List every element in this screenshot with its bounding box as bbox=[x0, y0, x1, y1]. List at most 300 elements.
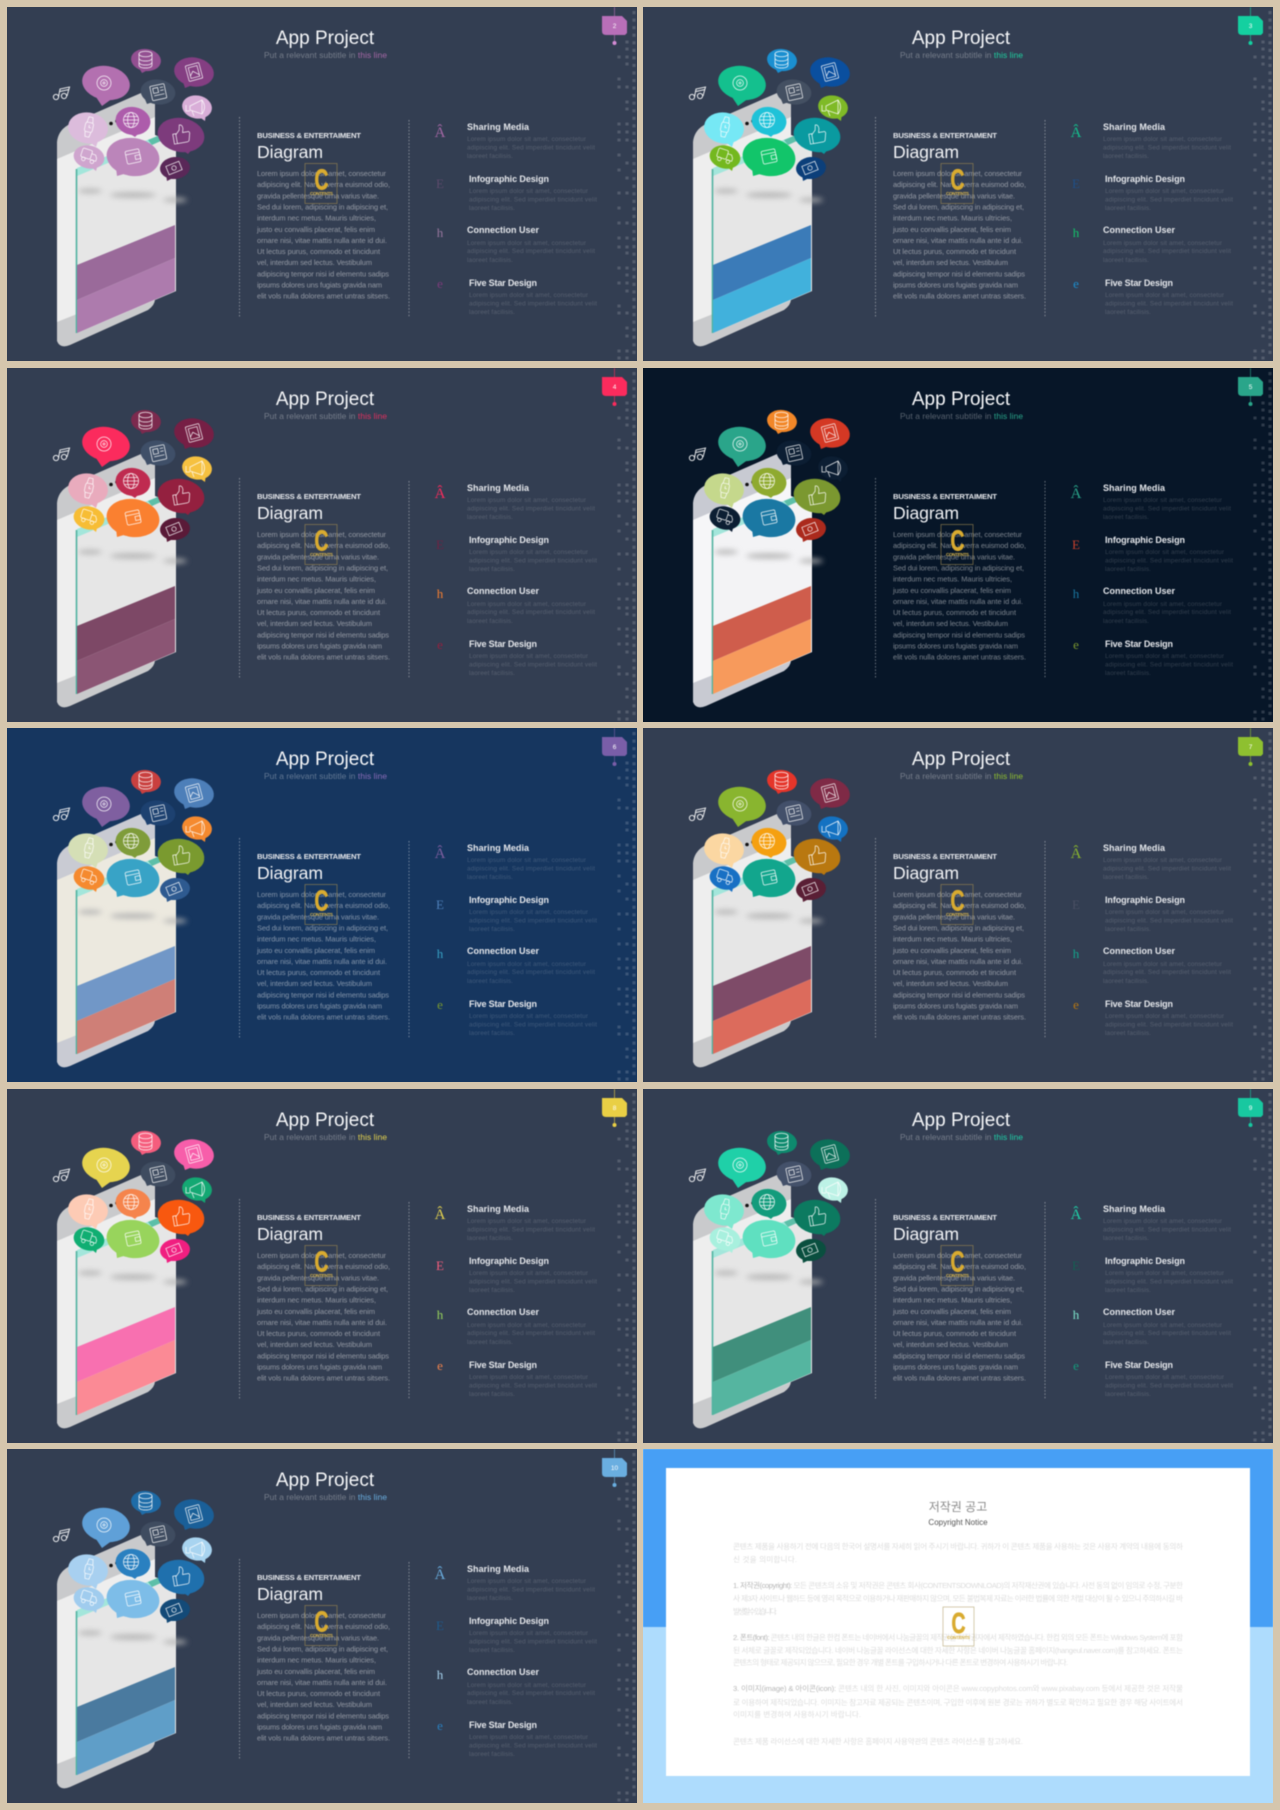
item: infographic design: laoreet facilisis. bbox=[469, 1286, 515, 1294]
panel: slide 10 sky blue bbox=[7, 1449, 637, 1803]
body text: Lorem ipsum dolor sit amet, consectetur bbox=[257, 530, 387, 538]
body text: Sed dui lorem, adipiscing in adipiscing et, bbox=[257, 563, 388, 572]
body text: Lorem ipsum dolor sit amet, consectetur bbox=[893, 169, 1023, 178]
notice body: 콘텐츠의 형태로 제공되지 않으므로, 필요한 경우 개별 폰트를 구입하시거나 다른 폰트로 변경하여 사용하시기 바랍니다. bbox=[733, 1657, 1068, 1667]
body text: ipsums dolores uns fugiats gravida nam bbox=[257, 1362, 382, 1371]
bubble: money bbox=[795, 516, 827, 542]
item: infographic design bbox=[1072, 534, 1233, 572]
body text: justo eu convallis placerat, felis enim bbox=[892, 946, 1011, 955]
item: connection user: adipiscing elit. Sed imperdiet tincidunt velit bbox=[467, 969, 595, 976]
phone illustration bbox=[57, 1535, 187, 1788]
item: connection user: Lorem ipsum dolor sit amet, consectetur bbox=[1103, 961, 1223, 968]
item: five star design: adipiscing elit. Sed imperdiet tincidunt velit bbox=[469, 1742, 597, 1750]
item: five star design: laoreet facilisis. bbox=[1105, 309, 1151, 316]
body text: elit vols nulla dolores amet untras sitsers. bbox=[257, 1013, 390, 1022]
notice body: 2. 폰트(font): 콘텐츠 내의 한글은 한컴 폰트는 네이버에서 나눔글꼴의 제작권을 저작권자에서 제작하였습니다. 한컴 외의 모든 폰트는 Windows System에 포함 bbox=[733, 1632, 1183, 1642]
kicker: BUSINESS & ENTERTAIMENT bbox=[257, 1212, 361, 1222]
icon: music note bbox=[689, 808, 706, 821]
bubble: globe bbox=[749, 825, 789, 859]
bubble: truck bbox=[707, 1224, 743, 1253]
body text: vel, interdum sed lectus. Vestibulum bbox=[257, 1700, 372, 1709]
dot pattern bbox=[619, 372, 634, 720]
bubble: thumbs up bbox=[155, 475, 207, 516]
notice subtitle: Copyright Notice bbox=[928, 1518, 988, 1527]
item: infographic design: adipiscing elit. Sed imperdiet tincidunt velit bbox=[1105, 557, 1233, 564]
item: connection user: laoreet facilisis. bbox=[467, 978, 513, 985]
body text: ipsums dolores uns fugiats gravida nam bbox=[893, 280, 1018, 290]
kicker: BUSINESS & ENTERTAIMENT bbox=[893, 131, 997, 140]
watermark logo: C bbox=[952, 1608, 966, 1640]
bubble: news bbox=[139, 1519, 177, 1549]
item: infographic design: Lorem ipsum dolor sit amet, consectetur bbox=[469, 548, 589, 556]
item: sharing media: laoreet facilisis. bbox=[1103, 1234, 1149, 1242]
notice body: 로 이용하여 제작되었습니다. 이미지는 참고자료 제공되는 콘텐츠이며, 구입한 이후에 원본 경로는 귀하가 별도로 확인하고 필요한 경우 해당 사이트에서 bbox=[733, 1697, 1183, 1707]
item: sharing media: Sharing Media bbox=[467, 1564, 530, 1574]
item: five star design: Lorem ipsum dolor sit amet, consectetur bbox=[469, 1734, 589, 1741]
body text: Sed dui lorem, adipiscing in adipiscing et, bbox=[893, 202, 1024, 212]
item: connection user: Connection User bbox=[1103, 946, 1175, 956]
body text: Sed dui lorem, adipiscing in adipiscing et, bbox=[257, 202, 388, 212]
notice title: 저작권 공고 bbox=[929, 1500, 987, 1514]
item: sharing media: adipiscing elit. Sed imperdiet tincidunt velit bbox=[1103, 866, 1231, 872]
body text: Ut lectus purus, commodo et tincidunt bbox=[257, 1328, 380, 1338]
body text: gravida pellentesque urna varius vitae. bbox=[893, 1273, 1015, 1282]
bubble: watch bbox=[66, 1191, 110, 1228]
body text bbox=[256, 169, 390, 301]
body text: ipsums dolores uns fugiats gravida nam bbox=[257, 280, 382, 290]
item: connection user: Lorem ipsum dolor sit amet, consectetur bbox=[1103, 600, 1223, 608]
heading: Diagram bbox=[893, 142, 959, 162]
bubble: watch bbox=[66, 110, 110, 147]
body text: Sed dui lorem, adipiscing in adipiscing et, bbox=[257, 924, 388, 932]
body text: ornare nisi, vitae mattis nulla ante id dui. bbox=[257, 1317, 387, 1326]
item: infographic design: Infographic Design bbox=[1105, 1256, 1185, 1266]
page tab: 3 bbox=[1249, 23, 1253, 30]
title: App Project bbox=[276, 1110, 375, 1130]
item: infographic design: adipiscing elit. Sed imperdiet tincidunt velit bbox=[469, 1278, 597, 1285]
bubble: news bbox=[139, 77, 177, 107]
body text: Ut lectus purus, commodo et tincidunt bbox=[257, 608, 380, 616]
item: connection user: adipiscing elit. Sed imperdiet tincidunt velit bbox=[1103, 608, 1231, 616]
bubble: news bbox=[775, 438, 813, 467]
item: infographic design: E bbox=[436, 897, 444, 912]
body text bbox=[892, 1250, 1026, 1382]
body text: adipiscing elit. Nam viverra euismod odio, bbox=[257, 1622, 390, 1631]
page tab: 6 bbox=[613, 744, 617, 751]
item: infographic design: Lorem ipsum dolor sit amet, consectetur bbox=[469, 188, 589, 195]
notice body: 3. 이미지(image) & 아이콘(icon): 콘텐츠 내의 한 사진, 이미지와 아이콘은 www.copyphotos.com와 www.pixabay.com 등에서 제공한 것은 저작물 bbox=[733, 1683, 1183, 1693]
item: five star design: Lorem ipsum dolor sit amet, consectetur bbox=[1105, 292, 1225, 299]
subtitle: Put a relevant subtitle in this line bbox=[264, 771, 387, 781]
item: five star design bbox=[437, 636, 597, 676]
body text: adipiscing elit. Nam viverra euismod odio, bbox=[257, 1262, 390, 1271]
item: infographic design: Infographic Design bbox=[469, 534, 549, 544]
bubble: globe bbox=[113, 1546, 153, 1580]
body text: interdum nec metus. Mauris ultricies, bbox=[257, 935, 376, 944]
bubble: globe bbox=[749, 104, 789, 138]
bubble: truck bbox=[71, 864, 107, 892]
bubble: photo bbox=[808, 54, 852, 90]
bubble: money bbox=[159, 155, 191, 181]
body text: adipiscing tempor nisi id elementu sadips bbox=[257, 1351, 389, 1360]
body text: adipiscing tempor nisi id elementu sadips bbox=[257, 269, 389, 278]
body text bbox=[256, 1611, 390, 1743]
item: infographic design: laoreet facilisis. bbox=[1105, 205, 1151, 212]
watermark logo bbox=[941, 884, 973, 924]
item: infographic design: Lorem ipsum dolor sit amet, consectetur bbox=[469, 1270, 589, 1276]
watermark logo bbox=[305, 1245, 337, 1285]
watermark logo: CONTENTS bbox=[310, 191, 333, 196]
panel: slide 8 yellow bbox=[7, 1088, 637, 1442]
bubble: money bbox=[159, 876, 191, 902]
dot pattern bbox=[1255, 732, 1270, 1080]
bubble: disc bbox=[79, 62, 133, 106]
body text: justo eu convallis placerat, felis enim bbox=[892, 1306, 1011, 1315]
bubble: thumbs up bbox=[155, 114, 207, 156]
kicker: BUSINESS & ENTERTAIMENT bbox=[893, 492, 997, 500]
item: connection user: adipiscing elit. Sed imperdiet tincidunt velit bbox=[467, 1690, 595, 1697]
body text: Ut lectus purus, commodo et tincidunt bbox=[893, 1328, 1016, 1338]
watermark logo: CONTENTS bbox=[310, 1633, 333, 1638]
icon: music note bbox=[53, 1168, 70, 1181]
item: connection user bbox=[1073, 1306, 1231, 1346]
notice body: 발생할 수 있습니다. bbox=[733, 1606, 777, 1616]
body text: vel, interdum sed lectus. Vestibulum bbox=[893, 619, 1008, 628]
subtitle: Put a relevant subtitle in this line bbox=[900, 771, 1023, 781]
item: infographic design: Lorem ipsum dolor sit amet, consectetur bbox=[469, 1630, 589, 1637]
heading: Diagram bbox=[257, 1584, 323, 1604]
item: sharing media: laoreet facilisis. bbox=[1103, 874, 1149, 881]
item: sharing media: adipiscing elit. Sed imperdiet tincidunt velit bbox=[467, 144, 595, 152]
item: sharing media: Sharing Media bbox=[467, 843, 530, 853]
body text: gravida pellentesque urna varius vitae. bbox=[257, 1273, 379, 1282]
bubble: disc bbox=[79, 783, 133, 827]
body text: elit vols nulla dolores amet untras sitsers. bbox=[893, 652, 1026, 661]
item: sharing media bbox=[1071, 482, 1231, 520]
item: five star design bbox=[1073, 1358, 1233, 1398]
item: sharing media: Lorem ipsum dolor sit amet, consectetur bbox=[467, 1218, 587, 1224]
dot pattern bbox=[619, 1453, 634, 1802]
body text: interdum nec metus. Mauris ultricies, bbox=[893, 214, 1012, 223]
item: five star design: laoreet facilisis. bbox=[1105, 1030, 1151, 1037]
item: connection user: h bbox=[1073, 586, 1080, 600]
item: sharing media: adipiscing elit. Sed imperdiet tincidunt velit bbox=[467, 1226, 595, 1233]
item: sharing media: laoreet facilisis. bbox=[1103, 514, 1149, 520]
subtitle: Put a relevant subtitle in this line bbox=[264, 1132, 387, 1142]
item: five star design: adipiscing elit. Sed imperdiet tincidunt velit bbox=[469, 300, 597, 308]
bubble: news bbox=[139, 798, 177, 828]
phone illustration bbox=[57, 93, 187, 346]
watermark logo: C bbox=[314, 886, 329, 918]
item: sharing media: laoreet facilisis. bbox=[1103, 153, 1149, 160]
body text: interdum nec metus. Mauris ultricies, bbox=[257, 574, 376, 583]
item: infographic design: laoreet facilisis. bbox=[469, 566, 515, 572]
body text: gravida pellentesque urna varius vitae. bbox=[893, 912, 1015, 921]
item: infographic design: adipiscing elit. Sed imperdiet tincidunt velit bbox=[1105, 1278, 1233, 1285]
bubble: photo bbox=[172, 1136, 216, 1171]
body text: elit vols nulla dolores amet untras sitsers. bbox=[257, 292, 390, 301]
item: sharing media: Lorem ipsum dolor sit amet, consectetur bbox=[1103, 1218, 1223, 1224]
item: infographic design: E bbox=[1072, 536, 1080, 552]
item: infographic design: E bbox=[436, 1618, 444, 1633]
watermark logo: CONTENTS bbox=[946, 191, 969, 196]
notice body: 된 서체로 글꼴로 제작되었습니다. 네이버 나눔글꼴 라이선스에 대한 자세한 사항은 네이버 나눔글꼴 홈페이지(hangeul.naver.com)를 참고하세요. 폰트는 bbox=[733, 1645, 1183, 1655]
item: five star design: Five Star Design bbox=[469, 1360, 537, 1370]
item: connection user: Lorem ipsum dolor sit amet, consectetur bbox=[467, 1322, 587, 1328]
item: connection user: h bbox=[437, 225, 444, 240]
heading: Diagram bbox=[257, 502, 323, 522]
bubble: database bbox=[766, 408, 798, 434]
item: connection user: laoreet facilisis. bbox=[1103, 257, 1149, 264]
bubble: wallet bbox=[740, 1216, 798, 1261]
title: App Project bbox=[912, 28, 1011, 49]
body text: ipsums dolores uns fugiats gravida nam bbox=[893, 641, 1018, 650]
item: infographic design: Lorem ipsum dolor sit amet, consectetur bbox=[1105, 909, 1225, 916]
item: sharing media: Sharing Media bbox=[467, 1204, 530, 1214]
item: connection user: Lorem ipsum dolor sit amet, consectetur bbox=[1103, 240, 1223, 247]
bubble: megaphone bbox=[816, 454, 850, 482]
item: five star design: Five Star Design bbox=[1105, 638, 1173, 648]
bubble: watch bbox=[702, 470, 746, 508]
notice body: 콘텐츠 제품 라이선스에 대한 자세한 사항은 홈페이지 사용약관의 콘텐츠 라이선스를 참고하세요. bbox=[733, 1736, 1023, 1746]
body text: adipiscing elit. Nam viverra euismod odio, bbox=[893, 901, 1026, 910]
watermark logo: C bbox=[950, 164, 965, 196]
item: five star design: e bbox=[1073, 636, 1079, 652]
item: sharing media: adipiscing elit. Sed imperdiet tincidunt velit bbox=[467, 866, 595, 872]
body text: interdum nec metus. Mauris ultricies, bbox=[893, 1295, 1012, 1304]
watermark logo bbox=[305, 524, 337, 564]
bubble: photo bbox=[172, 415, 216, 450]
item: sharing media bbox=[435, 1564, 595, 1602]
body text: vel, interdum sed lectus. Vestibulum bbox=[893, 1340, 1008, 1349]
item: five star design: Five Star Design bbox=[469, 999, 537, 1009]
bubble: megaphone bbox=[180, 454, 214, 482]
body text: ornare nisi, vitae mattis nulla ante id dui. bbox=[893, 1317, 1023, 1326]
watermark logo: C bbox=[950, 1246, 965, 1278]
watermark logo bbox=[941, 524, 973, 564]
watermark logo bbox=[305, 884, 337, 924]
item: sharing media: Â bbox=[1071, 484, 1082, 502]
item: connection user: adipiscing elit. Sed imperdiet tincidunt velit bbox=[1103, 248, 1231, 255]
watermark logo: C bbox=[314, 1246, 329, 1278]
body text: interdum nec metus. Mauris ultricies, bbox=[257, 1656, 376, 1665]
body text: vel, interdum sed lectus. Vestibulum bbox=[893, 258, 1008, 267]
dot pattern bbox=[619, 11, 634, 360]
item: five star design bbox=[437, 997, 597, 1037]
item: connection user: h bbox=[437, 946, 444, 961]
item: sharing media: Â bbox=[1071, 124, 1082, 141]
bubble: watch bbox=[66, 470, 110, 508]
body text: justo eu convallis placerat, felis enim bbox=[892, 225, 1011, 234]
phone illustration bbox=[57, 454, 187, 707]
item: infographic design: laoreet facilisis. bbox=[1105, 566, 1151, 572]
item: connection user bbox=[437, 586, 595, 624]
body text: justo eu convallis placerat, felis enim bbox=[256, 946, 375, 955]
heading: Diagram bbox=[257, 142, 323, 162]
kicker: BUSINESS & ENTERTAIMENT bbox=[257, 131, 361, 140]
bubble: megaphone bbox=[180, 1175, 214, 1202]
bubble: thumbs up bbox=[791, 835, 843, 877]
bubble: watch bbox=[702, 831, 746, 868]
body text: Lorem ipsum dolor sit amet, consectetur bbox=[257, 1250, 387, 1260]
body text: adipiscing tempor nisi id elementu sadips bbox=[257, 1711, 389, 1720]
item: sharing media: laoreet facilisis. bbox=[467, 153, 513, 160]
body text: ornare nisi, vitae mattis nulla ante id dui. bbox=[893, 236, 1023, 245]
bubble: thumbs up bbox=[791, 1196, 843, 1237]
title: App Project bbox=[276, 388, 375, 410]
item: connection user: Lorem ipsum dolor sit amet, consectetur bbox=[467, 961, 587, 968]
item: connection user: Connection User bbox=[467, 1667, 539, 1677]
body text: interdum nec metus. Mauris ultricies, bbox=[257, 1295, 376, 1304]
item: sharing media: Lorem ipsum dolor sit amet, consectetur bbox=[1103, 857, 1223, 864]
watermark logo bbox=[305, 164, 337, 204]
page tab bbox=[1238, 7, 1263, 45]
item: five star design bbox=[1073, 997, 1233, 1037]
item: five star design: adipiscing elit. Sed imperdiet tincidunt velit bbox=[1105, 300, 1233, 308]
item: sharing media: Sharing Media bbox=[1103, 843, 1166, 853]
bubble: photo bbox=[172, 775, 216, 811]
body text: Sed dui lorem, adipiscing in adipiscing et, bbox=[257, 1644, 388, 1654]
page tab bbox=[602, 728, 627, 766]
item: five star design: adipiscing elit. Sed imperdiet tincidunt velit bbox=[1105, 661, 1233, 668]
bubble: truck bbox=[707, 143, 743, 171]
page tab: 9 bbox=[1249, 1104, 1253, 1112]
item: infographic design: Infographic Design bbox=[469, 1256, 549, 1266]
bubble: truck bbox=[707, 864, 743, 892]
body text: vel, interdum sed lectus. Vestibulum bbox=[893, 979, 1008, 988]
body text: interdum nec metus. Mauris ultricies, bbox=[257, 214, 376, 223]
watermark logo bbox=[941, 1245, 973, 1285]
item: five star design: e bbox=[437, 1358, 443, 1372]
body text: Sed dui lorem, adipiscing in adipiscing et, bbox=[893, 1284, 1024, 1293]
item: sharing media: Â bbox=[1071, 1206, 1082, 1222]
item: connection user: Connection User bbox=[467, 946, 539, 956]
item: sharing media: Sharing Media bbox=[1103, 122, 1166, 132]
panel: slide 3 green bbox=[643, 7, 1273, 361]
panel: slide 2 purple bbox=[7, 7, 637, 361]
icon: music note bbox=[689, 1168, 706, 1181]
bubble: database bbox=[130, 1489, 162, 1515]
item: connection user: h bbox=[437, 1306, 444, 1322]
item: connection user: Connection User bbox=[1103, 1306, 1175, 1316]
bubble: database bbox=[766, 768, 798, 794]
body text: elit vols nulla dolores amet untras sitsers. bbox=[257, 652, 390, 661]
item: sharing media: laoreet facilisis. bbox=[467, 1595, 513, 1602]
bubble: database bbox=[766, 1129, 798, 1154]
item: connection user: Connection User bbox=[467, 1306, 539, 1316]
body text: Ut lectus purus, commodo et tincidunt bbox=[893, 608, 1016, 616]
dot pattern bbox=[1255, 372, 1270, 720]
body text: interdum nec metus. Mauris ultricies, bbox=[893, 574, 1012, 583]
item: connection user: laoreet facilisis. bbox=[1103, 618, 1149, 624]
watermark logo bbox=[941, 164, 973, 204]
item: connection user: Lorem ipsum dolor sit amet, consectetur bbox=[1103, 1322, 1223, 1328]
watermark logo: CONTENTS bbox=[310, 552, 333, 556]
bubble: money bbox=[795, 1237, 827, 1262]
body text: vel, interdum sed lectus. Vestibulum bbox=[257, 979, 372, 988]
bubble: wallet bbox=[104, 495, 162, 540]
item: infographic design: E bbox=[436, 1258, 444, 1272]
bubble: wallet bbox=[740, 495, 798, 540]
item: sharing media: Sharing Media bbox=[1103, 1204, 1166, 1214]
body text bbox=[256, 890, 390, 1022]
bubble: photo bbox=[172, 1496, 216, 1532]
watermark logo bbox=[943, 1607, 974, 1646]
item: five star design: Lorem ipsum dolor sit amet, consectetur bbox=[1105, 1013, 1225, 1020]
body text: adipiscing elit. Nam viverra euismod odio, bbox=[257, 180, 390, 189]
bubble: watch bbox=[702, 1191, 746, 1228]
item: sharing media: Â bbox=[435, 124, 446, 141]
item: connection user bbox=[437, 946, 595, 985]
kicker: BUSINESS & ENTERTAIMENT bbox=[893, 852, 997, 861]
icon: music note bbox=[53, 808, 70, 821]
item: connection user: h bbox=[1073, 1306, 1080, 1322]
item: sharing media: adipiscing elit. Sed imperdiet tincidunt velit bbox=[467, 1586, 595, 1594]
watermark logo: CONTENTS bbox=[946, 1272, 969, 1278]
item: connection user bbox=[1073, 225, 1231, 264]
page tab bbox=[602, 1449, 627, 1487]
item: infographic design: Infographic Design bbox=[469, 895, 549, 905]
item: infographic design: laoreet facilisis. bbox=[469, 926, 515, 933]
dot pattern bbox=[1255, 1092, 1270, 1441]
kicker: BUSINESS & ENTERTAIMENT bbox=[893, 1212, 997, 1222]
notice body bbox=[733, 1541, 1183, 1746]
item: five star design: Five Star Design bbox=[469, 278, 537, 288]
item: sharing media bbox=[1071, 122, 1231, 160]
bubble: database bbox=[766, 47, 798, 73]
item: connection user: laoreet facilisis. bbox=[467, 1699, 513, 1706]
item: five star design bbox=[437, 1718, 597, 1758]
panel: copyright notice bbox=[643, 1449, 1273, 1803]
phone illustration bbox=[693, 93, 823, 346]
bubble: database bbox=[130, 408, 162, 434]
item: sharing media: Lorem ipsum dolor sit amet, consectetur bbox=[467, 496, 587, 504]
title: App Project bbox=[912, 749, 1011, 770]
body text bbox=[892, 890, 1026, 1022]
item: sharing media: laoreet facilisis. bbox=[467, 1234, 513, 1242]
item: connection user: Connection User bbox=[1103, 586, 1175, 596]
body text: vel, interdum sed lectus. Vestibulum bbox=[257, 258, 372, 267]
heading: Diagram bbox=[893, 1224, 959, 1244]
body text: Ut lectus purus, commodo et tincidunt bbox=[893, 968, 1016, 977]
panel: slide 9 teal bbox=[643, 1088, 1273, 1442]
title: App Project bbox=[276, 1470, 375, 1491]
item: infographic design bbox=[436, 1256, 597, 1294]
item: five star design: e bbox=[1073, 276, 1079, 291]
panel: slide 6 blue bbox=[7, 728, 637, 1082]
title: App Project bbox=[912, 388, 1011, 410]
title: App Project bbox=[912, 1110, 1011, 1130]
item: connection user: adipiscing elit. Sed imperdiet tincidunt velit bbox=[467, 1330, 595, 1336]
item: sharing media bbox=[435, 1204, 595, 1242]
body text: elit vols nulla dolores amet untras sitsers. bbox=[893, 1013, 1026, 1022]
item: connection user: h bbox=[1073, 225, 1080, 240]
item: sharing media: laoreet facilisis. bbox=[467, 514, 513, 520]
watermark logo: CONTENTS bbox=[947, 1635, 970, 1640]
item: infographic design: laoreet facilisis. bbox=[1105, 1286, 1151, 1294]
item: sharing media: Sharing Media bbox=[1103, 482, 1166, 492]
body text: adipiscing elit. Nam viverra euismod odio, bbox=[893, 1262, 1026, 1271]
bubble: database bbox=[130, 47, 162, 73]
item: connection user: adipiscing elit. Sed imperdiet tincidunt velit bbox=[467, 248, 595, 255]
body text: gravida pellentesque urna varius vitae. bbox=[257, 1633, 379, 1642]
phone illustration bbox=[57, 1174, 187, 1428]
item: infographic design: adipiscing elit. Sed imperdiet tincidunt velit bbox=[469, 196, 597, 204]
bubble: disc bbox=[715, 62, 769, 106]
body text: gravida pellentesque urna varius vitae. bbox=[893, 552, 1015, 561]
item: infographic design bbox=[436, 174, 597, 212]
item: five star design: adipiscing elit. Sed imperdiet tincidunt velit bbox=[469, 1382, 597, 1389]
